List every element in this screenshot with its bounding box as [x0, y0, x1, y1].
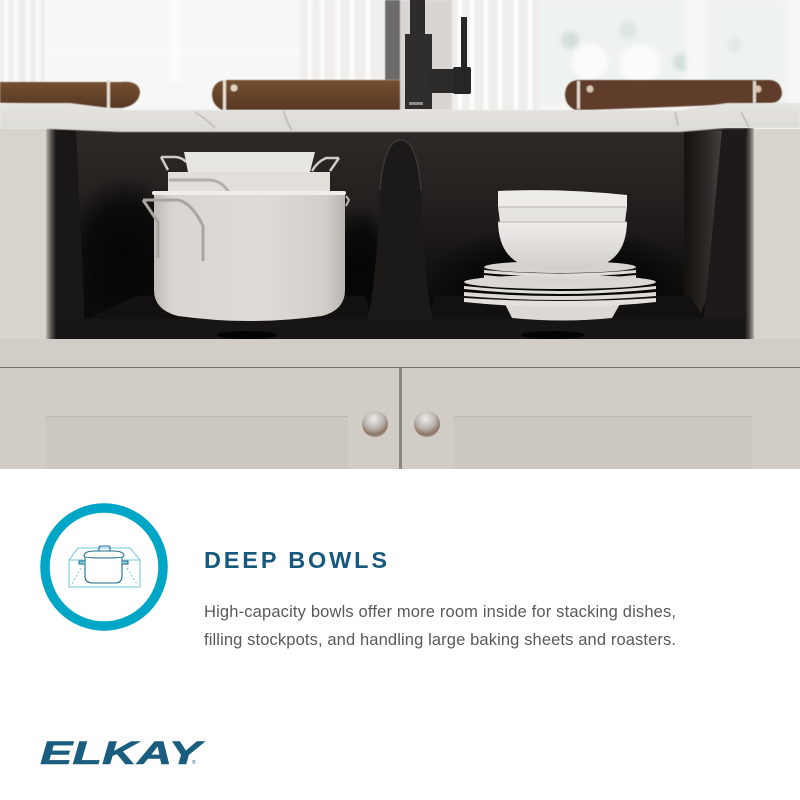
chair backs: [0, 80, 782, 110]
logo: Elkay: ELKAY: [40, 735, 205, 771]
photo: kitchen sink scene: [0, 0, 800, 469]
logo: Elkay: [40, 735, 205, 771]
cabinet rail: [0, 339, 800, 368]
icon: deep bowl with stockpot: [45, 508, 163, 626]
small plates: [484, 275, 636, 282]
body text: High-capacity bowls offer more room inside for stacking dishes,: [204, 603, 676, 621]
bowl divider: [367, 140, 433, 320]
body text: filling stockpots, and handling large baking sheets and roasters.: [204, 631, 676, 649]
icon ring: [45, 508, 163, 626]
white lower panel: [0, 469, 800, 800]
faucet: [405, 0, 471, 109]
heading: DEEP BOWLS: [204, 547, 387, 573]
logo: Elkay: ®: [192, 759, 196, 766]
drains: [217, 331, 277, 339]
cabinet doors: [0, 368, 800, 469]
body text: [204, 603, 676, 649]
plate foot: [505, 304, 620, 320]
icon: basin outline: [69, 548, 140, 587]
large plates: [464, 298, 656, 307]
dark shadows behind dishes: [65, 175, 695, 335]
bowls: [498, 222, 627, 269]
stacked dishes: [464, 190, 656, 320]
marble countertop: [0, 103, 800, 132]
basin floor: [85, 296, 705, 320]
stacked pots: [143, 152, 349, 321]
basin side walls: [56, 130, 84, 339]
side cabinet panels: [0, 129, 800, 340]
window background: [0, 0, 800, 132]
sink basin cavity: [46, 128, 754, 340]
icon: stockpot: [85, 556, 122, 583]
knobs: [362, 411, 440, 437]
